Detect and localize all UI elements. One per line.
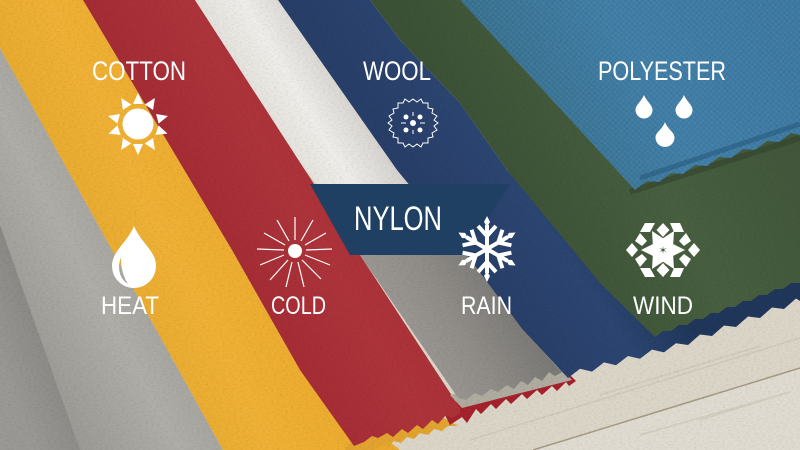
icon: three rain drops	[636, 95, 692, 147]
icon: large water drop	[112, 226, 156, 288]
fabric: red swatch	[83, 0, 460, 446]
label: HEAT: HEAT	[101, 292, 159, 320]
label: POLYESTER: POLYESTER	[598, 56, 726, 86]
fabric: yellow zigzag hem	[345, 410, 458, 450]
fabric: green swatch	[370, 0, 800, 337]
fabric: red hem zigzag under grey	[440, 375, 576, 425]
fabric: white swatch	[195, 0, 430, 210]
fabric: grey swatch	[340, 225, 562, 400]
fabric: light grey cotton swatch	[0, 48, 223, 450]
fabric: grey hem	[450, 368, 572, 408]
label: COTTON: COTTON	[92, 56, 186, 86]
icon: wool burst	[388, 99, 438, 147]
label: COLD: COLD	[271, 292, 326, 320]
label: WOOL: WOOL	[363, 56, 431, 86]
icon: thin-rayed sun	[257, 217, 332, 287]
icon: sun	[107, 93, 169, 155]
label: WIND: WIND	[633, 292, 693, 320]
nylon banner	[310, 184, 510, 255]
label: RAIN: RAIN	[461, 292, 512, 320]
icon: geometric hexagon mosaic	[626, 223, 700, 277]
fabric: yellow swatch	[0, 0, 400, 450]
fabric: navy swatch	[278, 0, 800, 378]
icon: snowflake	[454, 216, 520, 282]
banner label: NYLON: NYLON	[354, 200, 442, 238]
fabric: blue polyester swatch	[460, 0, 800, 192]
